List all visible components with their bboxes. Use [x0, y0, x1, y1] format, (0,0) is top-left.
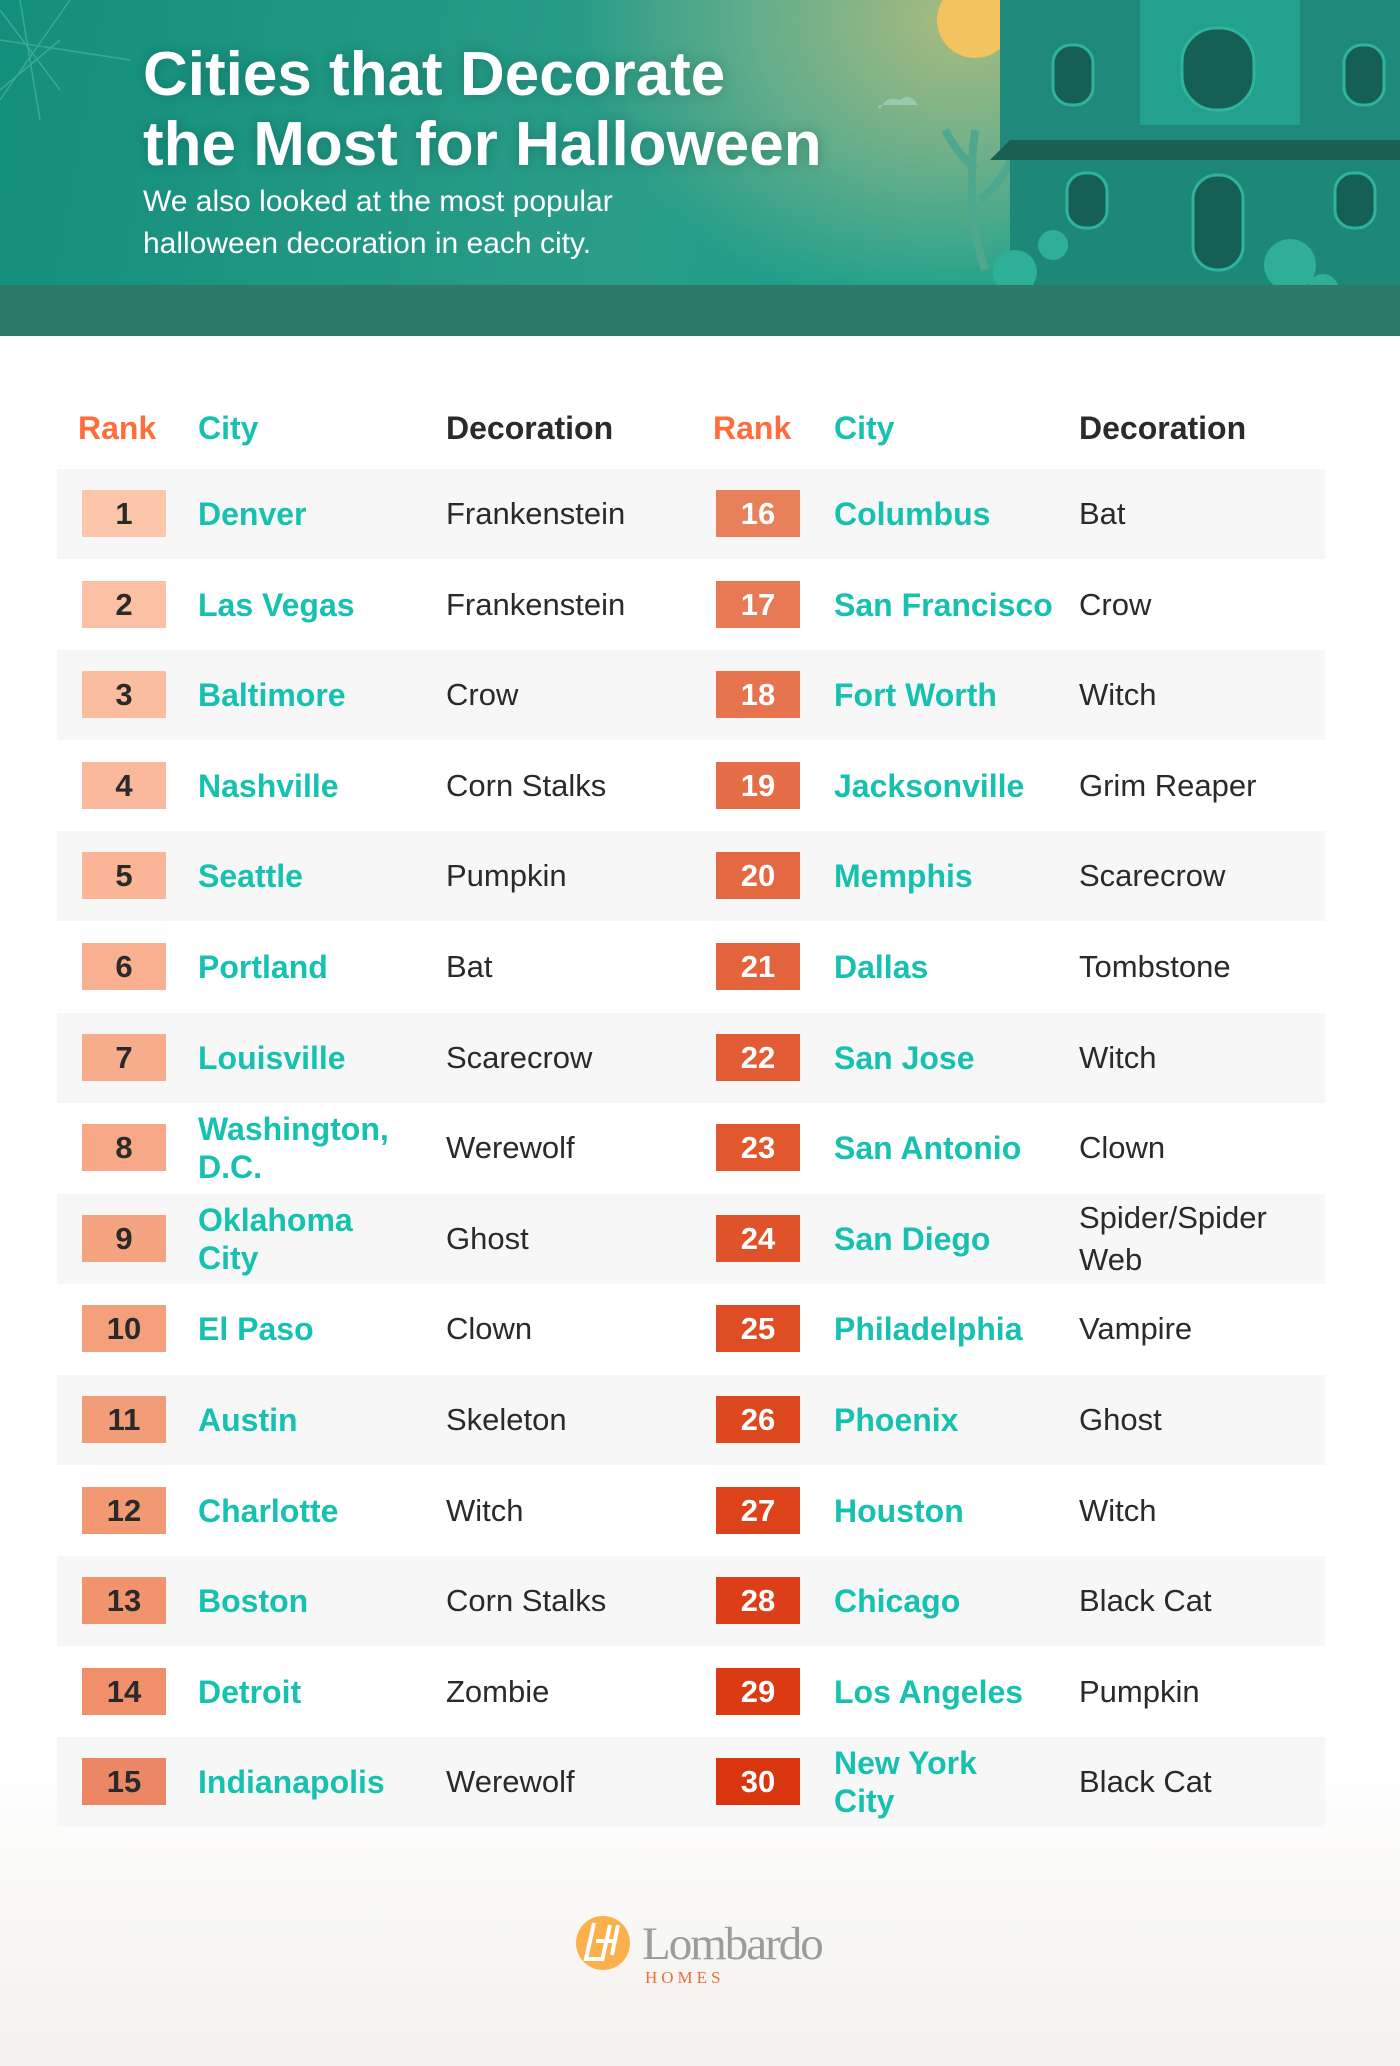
- table rows: Dallas: [834, 949, 928, 985]
- subtitle: [143, 185, 613, 260]
- table rows: Scarecrow: [446, 1040, 592, 1075]
- table rows: 2: [115, 586, 133, 622]
- table rows: Web: [1079, 1242, 1142, 1277]
- table rows: Corn Stalks: [446, 768, 606, 803]
- table rows: Werewolf: [446, 1764, 575, 1799]
- icon: logo circle: [576, 1916, 630, 1970]
- table rows: Chicago: [834, 1583, 960, 1619]
- subtitle: We also looked at the most popular: [143, 185, 613, 218]
- table rows: 14: [107, 1674, 141, 1708]
- logo: Lombardo Homes: Lombardo: [642, 1918, 822, 1970]
- table headers: City: [834, 410, 894, 446]
- table rows: Washington,: [198, 1111, 389, 1147]
- table rows: Bat: [1079, 496, 1126, 531]
- table rows: Las Vegas: [198, 587, 355, 623]
- table rows: San Diego: [834, 1221, 990, 1257]
- table rows: Charlotte: [198, 1493, 338, 1529]
- header banner: [0, 0, 1400, 336]
- title: [142, 40, 822, 179]
- table rows: San Francisco: [834, 587, 1053, 623]
- table rows: Denver: [198, 496, 306, 532]
- table rows: Fort Worth: [834, 677, 997, 713]
- table headers: Rank: [78, 410, 156, 446]
- table rows: Clown: [1079, 1130, 1165, 1165]
- table rows: Witch: [446, 1493, 524, 1528]
- table rows: Columbus: [834, 496, 990, 532]
- table rows: New York: [834, 1745, 977, 1781]
- logo: Lombardo Homes: [576, 1916, 822, 1987]
- table rows: 11: [108, 1402, 140, 1436]
- table rows: Scarecrow: [1079, 858, 1225, 893]
- table rows: Pumpkin: [1079, 1674, 1200, 1709]
- table rows: Corn Stalks: [446, 1583, 606, 1618]
- table rows: Grim Reaper: [1079, 768, 1256, 803]
- table rows: 19: [741, 768, 775, 802]
- table rows: City: [198, 1240, 258, 1276]
- table rows: 23: [741, 1130, 775, 1164]
- table rows: 25: [741, 1310, 775, 1346]
- table rows: San Jose: [834, 1040, 975, 1076]
- table rows: Philadelphia: [834, 1311, 1022, 1347]
- table headers: Decoration: [446, 410, 613, 446]
- table rows: Seattle: [198, 858, 303, 894]
- table rows: El Paso: [198, 1311, 314, 1347]
- table rows: Skeleton: [446, 1402, 567, 1437]
- table rows: 1: [115, 496, 133, 530]
- table rows: Bat: [446, 949, 493, 984]
- table rows: 16: [741, 496, 775, 530]
- table rows: 13: [107, 1582, 141, 1618]
- table rows: Spider/Spider: [1079, 1200, 1267, 1235]
- table rows: 12: [107, 1492, 141, 1528]
- table headers: City: [198, 410, 258, 446]
- table rows: 21: [741, 948, 775, 984]
- table rows: 4: [115, 768, 133, 802]
- table rows: Indianapolis: [198, 1764, 385, 1800]
- table rows: Tombstone: [1079, 949, 1231, 984]
- table rows: Witch: [1079, 677, 1156, 712]
- table rows: City: [834, 1783, 894, 1819]
- table rows: 22: [741, 1040, 775, 1074]
- title: Cities that Decorate: [143, 40, 725, 109]
- logo: Lombardo Homes: HOMES: [645, 1968, 725, 1987]
- table rows: 5: [115, 858, 133, 892]
- table rows: Nashville: [198, 768, 339, 804]
- table rows: Witch: [1079, 1040, 1156, 1075]
- table rows: Zombie: [446, 1674, 549, 1709]
- table rows: 30: [741, 1764, 775, 1798]
- table rows: San Antonio: [834, 1130, 1021, 1166]
- table rows: Crow: [1079, 587, 1151, 622]
- table rows: Clown: [446, 1311, 532, 1346]
- table rows: Frankenstein: [446, 587, 625, 622]
- table rows: D.C.: [198, 1149, 262, 1185]
- table headers: Rank: [713, 410, 791, 446]
- table rows: Vampire: [1079, 1311, 1192, 1346]
- table rows: 6: [115, 948, 133, 984]
- table rows: Baltimore: [198, 677, 346, 713]
- table rows: 26: [741, 1402, 775, 1436]
- table rows: 7: [115, 1040, 133, 1074]
- table rows: Portland: [198, 949, 328, 985]
- table rows: Boston: [198, 1583, 308, 1619]
- table rows: 29: [741, 1674, 775, 1708]
- table rows: Los Angeles: [834, 1674, 1023, 1710]
- table rows: Crow: [446, 677, 518, 712]
- table rows: 3: [115, 676, 133, 712]
- table rows: 8: [115, 1130, 133, 1164]
- table rows: Ghost: [446, 1221, 529, 1256]
- table rows: Pumpkin: [446, 858, 567, 893]
- table rows: 20: [741, 858, 775, 892]
- table rows: Jacksonville: [834, 768, 1024, 804]
- table rows: Oklahoma: [198, 1202, 353, 1238]
- table headers: [78, 410, 1246, 446]
- table rows: Black Cat: [1079, 1764, 1212, 1799]
- table rows: 15: [107, 1764, 141, 1798]
- subtitle: halloween decoration in each city.: [143, 227, 591, 260]
- table rows: 28: [741, 1582, 775, 1618]
- table rows: Austin: [198, 1402, 298, 1438]
- table rows: Ghost: [1079, 1402, 1162, 1437]
- table rows: Witch: [1079, 1493, 1156, 1528]
- title: the Most for Halloween: [143, 110, 822, 179]
- table rows: Memphis: [834, 858, 973, 894]
- table rows: Phoenix: [834, 1402, 958, 1438]
- header illustration: haunted house: [0, 0, 1400, 336]
- table rows: Louisville: [198, 1040, 346, 1076]
- table rows: 9: [115, 1220, 133, 1256]
- table rows: Houston: [834, 1493, 964, 1529]
- table rows: [82, 490, 1267, 1819]
- table rows: 10: [107, 1310, 141, 1346]
- table rows: Detroit: [198, 1674, 301, 1710]
- table rows: Black Cat: [1079, 1583, 1212, 1618]
- table rows: Werewolf: [446, 1130, 575, 1165]
- table rows: 27: [741, 1492, 775, 1528]
- table rows: Frankenstein: [446, 496, 625, 531]
- table rows: 18: [741, 676, 775, 712]
- table rows: 17: [741, 586, 775, 622]
- table rows: 24: [741, 1220, 775, 1256]
- table headers: Decoration: [1079, 410, 1246, 446]
